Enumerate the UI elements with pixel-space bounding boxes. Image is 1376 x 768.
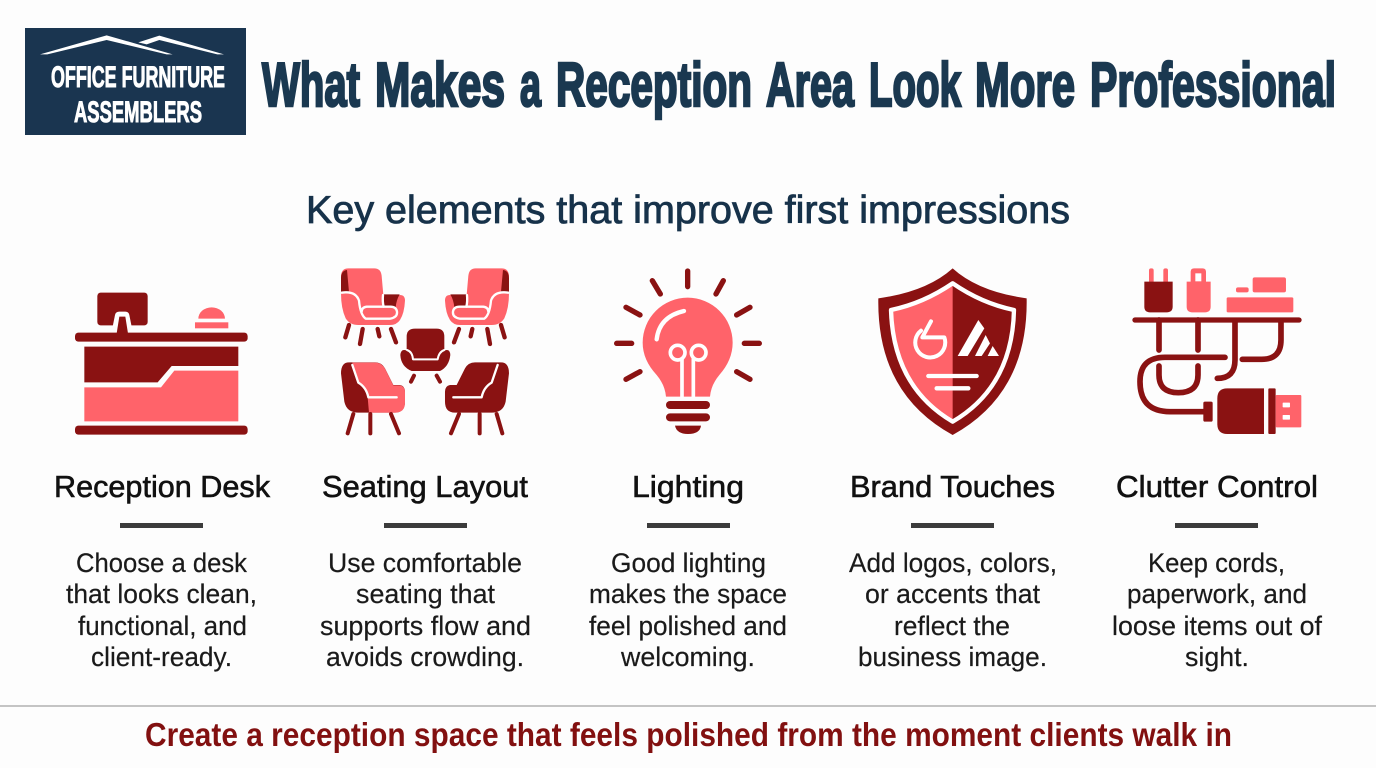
logo: Office Furniture Assemblers: ASSEMBLERS [74, 96, 202, 129]
text: Lighting description [589, 548, 787, 672]
chair top left [341, 268, 405, 344]
panel: seating layout [320, 268, 531, 672]
panel: clutter control [1112, 268, 1322, 672]
text: Clutter Control description: Keep cords, [1148, 548, 1285, 578]
chair bottom left [341, 362, 405, 433]
heading: Clutter Control: Clutter Control [1116, 469, 1318, 504]
title: Makes [375, 51, 505, 120]
text: Clutter Control description: sight. [1185, 642, 1249, 672]
text: Seating Layout description: supports flow and [320, 611, 531, 641]
footer call to action: Create a reception space that feels polished from the moment clients walk in [145, 716, 1232, 753]
panel: lighting [589, 271, 787, 672]
text: Brand Touches description: business image. [858, 642, 1047, 672]
text: Brand Touches description: reflect the [894, 611, 1010, 641]
text: Lighting description: makes the space [589, 579, 787, 609]
title [262, 51, 1336, 120]
heading: Lighting: Lighting [632, 469, 744, 504]
icon: brand shield [878, 268, 1027, 435]
title: More [975, 51, 1075, 120]
logo: Office Furniture Assemblers [25, 28, 246, 135]
title: Area [766, 51, 854, 120]
text: Lighting description: Good lighting [611, 548, 766, 578]
text: Brand Touches description: or accents that [865, 579, 1040, 609]
chair bottom right [445, 362, 509, 433]
text: Clutter Control description: loose items out of [1112, 611, 1322, 641]
text: Brand Touches description [849, 548, 1057, 672]
text: Lighting description: feel polished and [589, 611, 787, 641]
title: Look [869, 51, 961, 120]
title: What [262, 51, 360, 120]
panel: reception desk [54, 293, 270, 672]
icon: chairs [341, 268, 509, 433]
text: Reception Desk description: Choose a desk [76, 548, 247, 578]
text: Seating Layout description [320, 548, 531, 672]
text: Lighting description: welcoming. [620, 642, 755, 672]
title: a [520, 51, 541, 120]
logo: Office Furniture Assemblers: OFFICE FURNITURE [51, 61, 225, 94]
text: Reception Desk description [66, 548, 257, 672]
panel: brand touches [849, 268, 1057, 672]
text: Seating Layout description: avoids crowding. [326, 642, 524, 672]
text: Seating Layout description: seating that [356, 579, 495, 609]
icon: reception desk [75, 293, 248, 435]
chair top right [445, 268, 509, 344]
heading: Brand Touches: Brand Touches [850, 469, 1055, 504]
text: Clutter Control description [1112, 548, 1322, 672]
text: Seating Layout description: Use comfortable [328, 548, 522, 578]
text: Reception Desk description: that looks clean, [66, 579, 257, 609]
subtitle: Key elements that improve first impressions [306, 189, 1070, 232]
heading: Seating Layout: Seating Layout [322, 469, 528, 504]
text: Reception Desk description: functional, and [78, 611, 247, 641]
icon: cords and plugs [1135, 268, 1301, 434]
text: Clutter Control description: paperwork, and [1127, 579, 1307, 609]
icon: light bulb [617, 271, 759, 434]
text: Brand Touches description: Add logos, colors, [849, 548, 1057, 578]
title: Reception [556, 51, 752, 120]
text: Reception Desk description: client-ready. [91, 642, 232, 672]
heading: Reception Desk: Reception Desk [54, 469, 270, 504]
chair centre [400, 329, 450, 382]
